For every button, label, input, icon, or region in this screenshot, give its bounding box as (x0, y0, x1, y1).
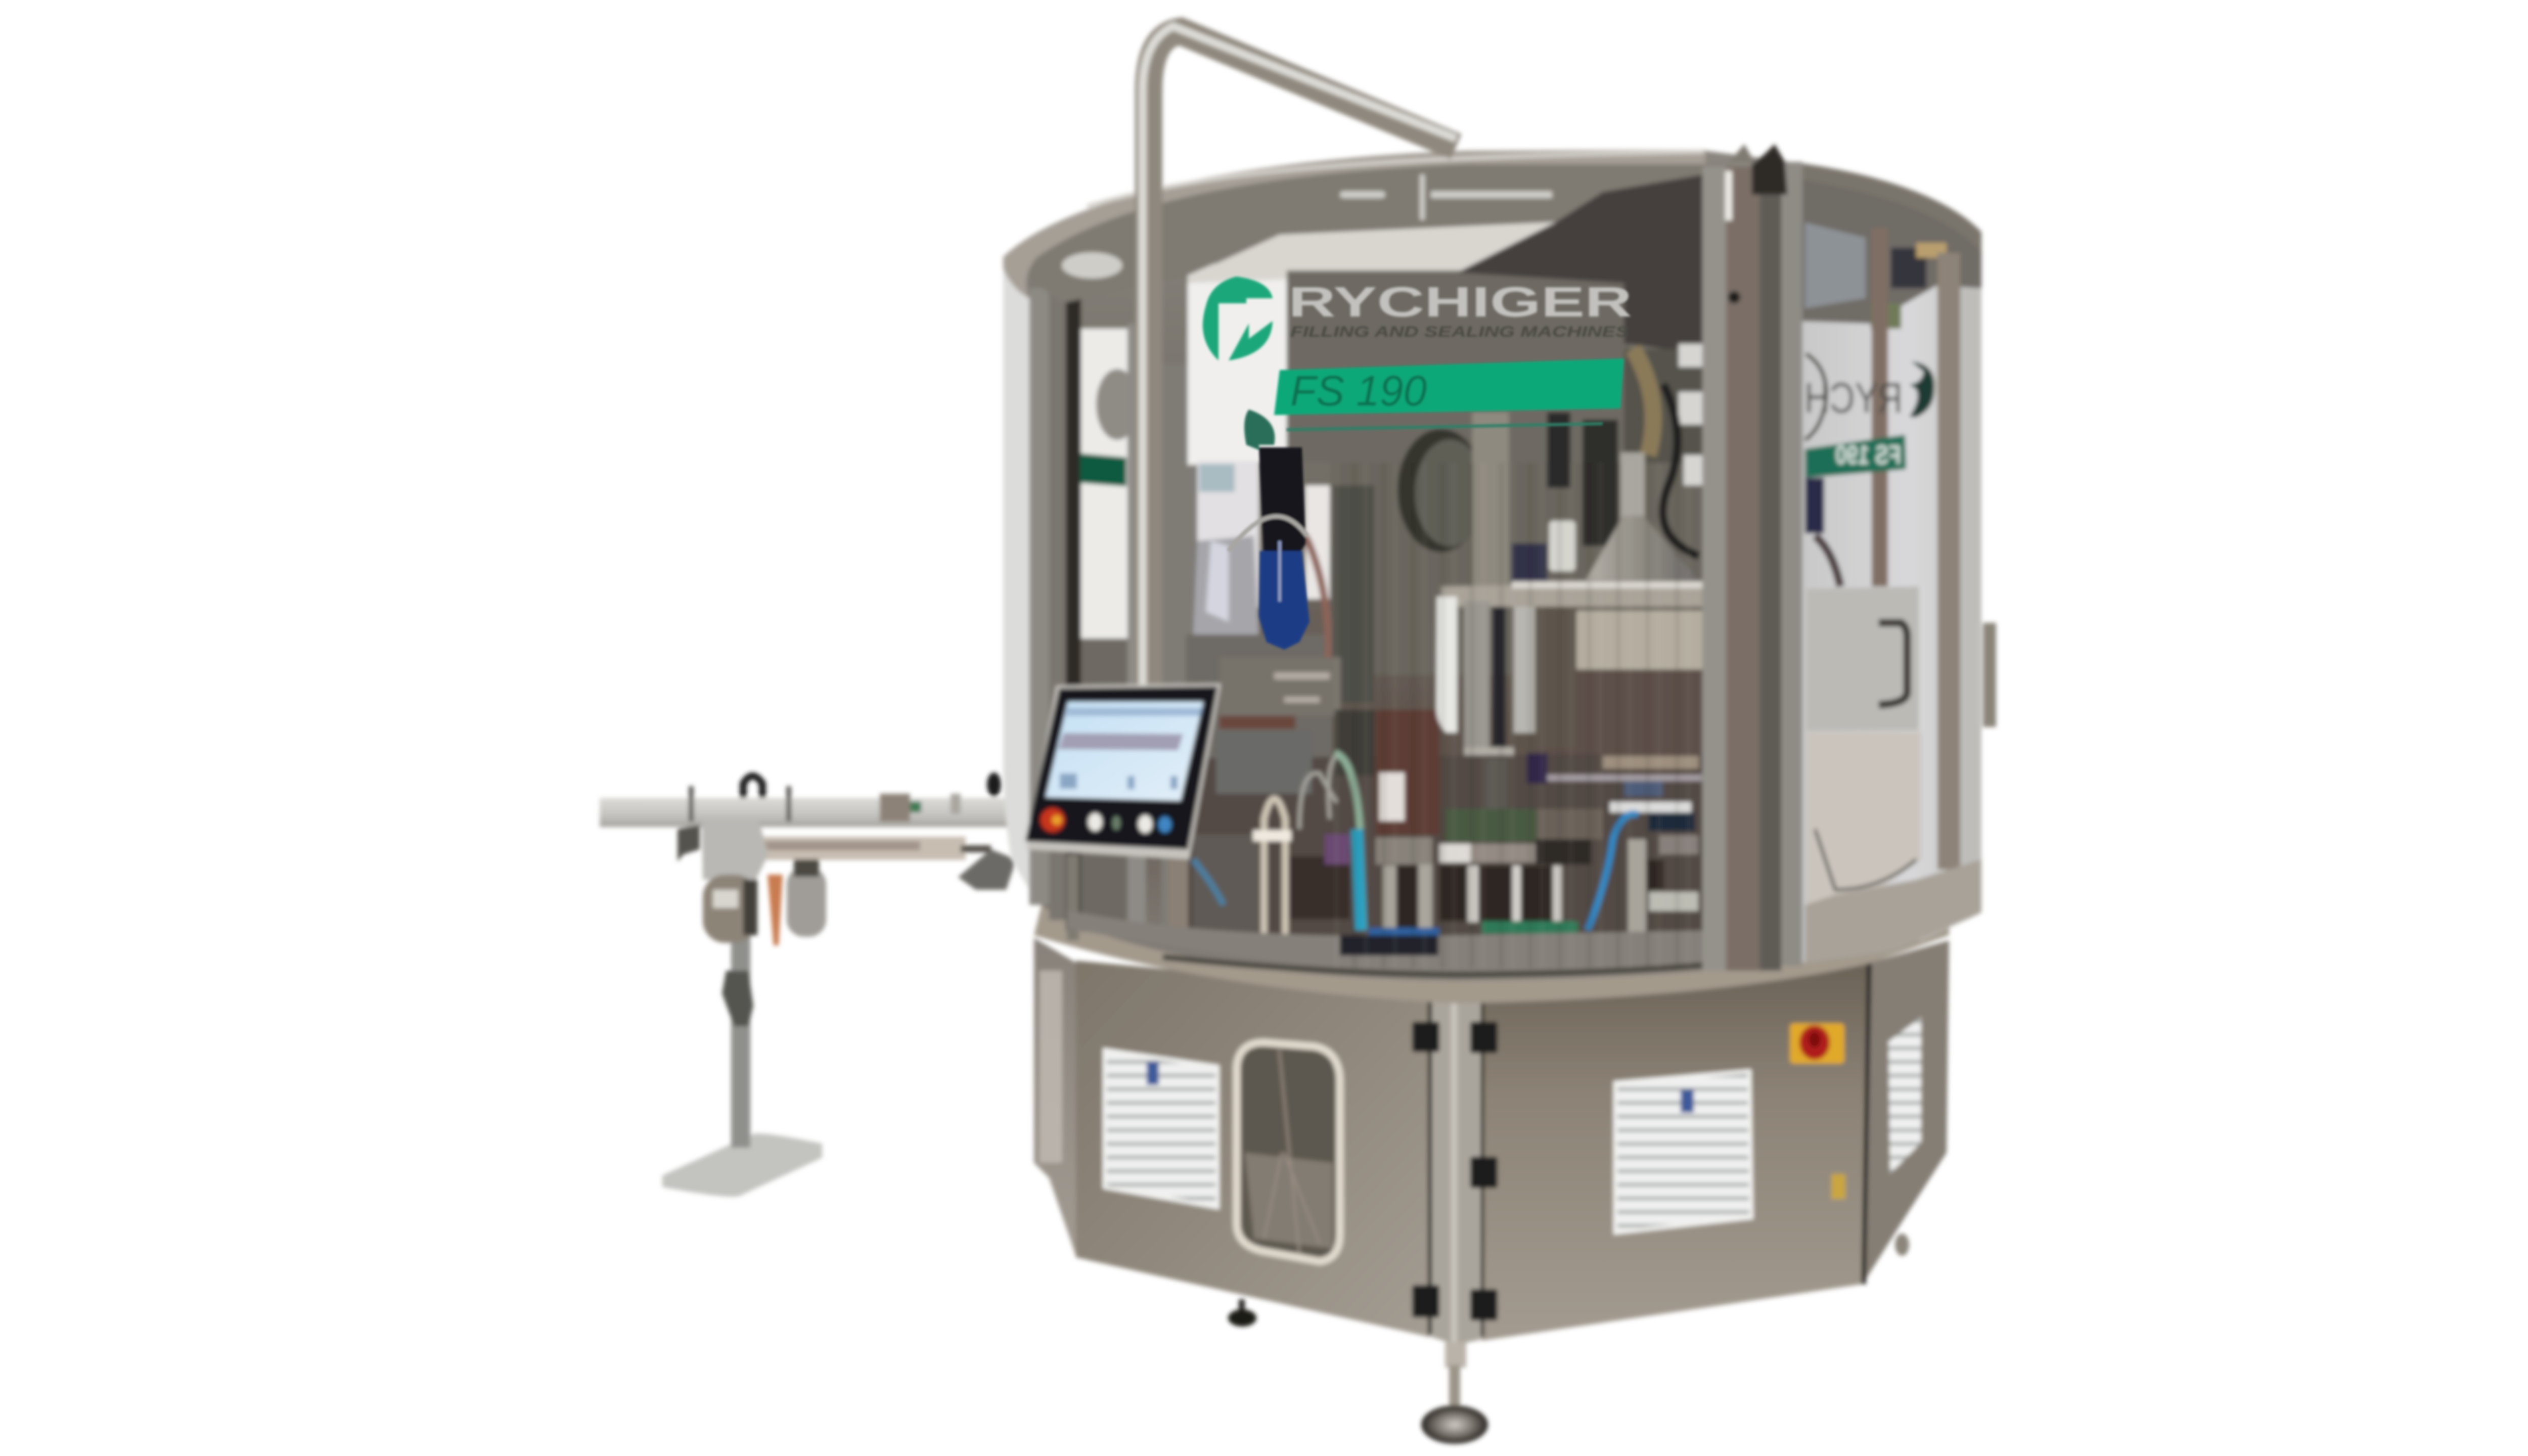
white sensor (1549, 521, 1575, 571)
mirrored logo through glass (1804, 354, 1934, 440)
white block lower right (1649, 892, 1698, 911)
funnel (1586, 452, 1698, 580)
base: left door (1076, 961, 1431, 1337)
blue tubes (1193, 814, 1638, 930)
wordmark backing (1287, 270, 1631, 463)
post right of pipe (1161, 364, 1197, 935)
black motor housing (1259, 447, 1305, 561)
door seam shadows (1864, 963, 1869, 1284)
bracket (702, 819, 769, 880)
blue-grey reflection (1805, 222, 1866, 308)
green wires (1335, 753, 1360, 829)
pipe (1143, 26, 1456, 698)
stand pole (731, 875, 750, 1148)
right door hinges (1470, 1022, 1498, 1321)
red brown cluster (1376, 710, 1439, 835)
front foot (1421, 1342, 1488, 1444)
window lower reflection (1245, 1153, 1333, 1249)
logo wordmark: RYCHIGER (1288, 278, 1632, 326)
handle (743, 776, 762, 798)
connector block (1340, 928, 1439, 956)
pale rear area (1197, 461, 1259, 608)
upper rail (600, 798, 1012, 827)
small indicator (1112, 816, 1120, 830)
stand clamp (722, 971, 753, 1026)
shelf clutter right (1446, 753, 1702, 842)
pale rails near panel (1274, 672, 1330, 703)
top highlights (1062, 174, 1552, 279)
emergency stop (1790, 1023, 1844, 1064)
interior back section (1331, 463, 1705, 675)
right top rim (1781, 161, 1981, 253)
top inner shade (1011, 163, 1709, 303)
knob (987, 772, 1001, 797)
table legs (1383, 839, 1646, 935)
rail fittings (689, 786, 961, 822)
right vent (1615, 1071, 1751, 1233)
purple wires (1325, 834, 1350, 864)
grey lower band under frame (1624, 349, 1704, 465)
motor right (787, 867, 826, 937)
rear roundel (1096, 369, 1139, 440)
base: far left facet (1034, 938, 1077, 1259)
reflected logo piece (1244, 410, 1275, 450)
white buttons (1088, 813, 1102, 831)
top rim left (1003, 150, 1705, 298)
loop handle (1264, 799, 1285, 935)
red strip (1220, 716, 1295, 729)
latch handle (1879, 623, 1907, 705)
conveyor with stand (600, 772, 1016, 1197)
machine (1003, 26, 1996, 1444)
side clip (678, 825, 700, 861)
grey column (1472, 412, 1509, 586)
far left facet reflection (1040, 971, 1062, 1163)
small rear foot (1228, 1299, 1256, 1327)
warning label (1831, 1174, 1845, 1199)
post highlight (1451, 991, 1457, 1342)
orange tube (768, 875, 783, 945)
cables by panel (1815, 536, 1840, 586)
blue button (1158, 816, 1171, 833)
table edge dark (1163, 957, 1709, 975)
white vial (1379, 772, 1405, 821)
motor tube loop (1229, 516, 1307, 551)
grey wire loops (1299, 753, 1340, 829)
cyan tube (1357, 829, 1361, 930)
lower right panel (1807, 732, 1921, 935)
screen lower icons (1060, 774, 1178, 789)
right side tab (1983, 623, 1996, 727)
left vent (1105, 1050, 1217, 1207)
model band (1274, 358, 1624, 415)
lower right tubing (1815, 829, 1916, 890)
table surface (1067, 910, 1709, 973)
screen (1046, 702, 1203, 801)
white gaps behind cables (1679, 344, 1704, 485)
lower mechanism area (1186, 753, 1704, 940)
center post (1432, 988, 1480, 1345)
sloped translucent panel (1188, 222, 1556, 283)
second grey post (1049, 273, 1066, 920)
side vent (1888, 1017, 1921, 1174)
table rim (1034, 905, 1949, 1004)
drum glass body (1003, 151, 1981, 981)
logo mark (1203, 277, 1273, 360)
right vent badge (1681, 1089, 1694, 1113)
motor left (703, 875, 757, 943)
right inner clutter (1871, 243, 1947, 329)
left lower rear stripes (1081, 639, 1129, 932)
left door hinges (1412, 1022, 1439, 1317)
model band: FS 190 (1290, 367, 1427, 415)
left vent badge (1147, 1062, 1159, 1085)
lower right cast edge (1805, 859, 1981, 963)
white bracket (1436, 597, 1457, 733)
screen header icons (1066, 708, 1202, 716)
green board (1482, 921, 1578, 934)
shelf (1441, 581, 1703, 607)
table work plate (1376, 835, 1698, 864)
dark area under cluster (1335, 710, 1375, 776)
motor highlight (1278, 541, 1281, 602)
dark column (1333, 485, 1374, 703)
gearbox cluster (1193, 536, 1259, 637)
rear logo band (1080, 453, 1126, 486)
motor circular cover (1397, 429, 1484, 552)
white gap by logo (1188, 253, 1287, 465)
left lower posts (1067, 834, 1259, 940)
stand base plate (662, 1133, 822, 1197)
mirrored model label (1805, 435, 1906, 478)
base: right door (1481, 963, 1869, 1341)
top rim highlight (1087, 152, 1704, 206)
right top mechanism (1800, 169, 1981, 324)
drum left bright edge (1003, 268, 1029, 890)
right glass section (1800, 163, 1981, 963)
right latch panel (1807, 586, 1919, 731)
window wires (1264, 1049, 1320, 1254)
front door column (1702, 144, 1802, 971)
dark vertical strip (1066, 243, 1081, 930)
screen status row (1059, 733, 1183, 750)
lower rear grey (1186, 634, 1332, 761)
glass vertical streaks (1335, 463, 1704, 968)
mirrored model label: FS 190 (1835, 440, 1901, 470)
white gap center (1305, 485, 1330, 599)
dark cables (1663, 384, 1699, 556)
reflected green line (1287, 424, 1603, 430)
dark lower cavities (1287, 856, 1663, 929)
touch panel (1025, 684, 1221, 859)
dark brown wall (1536, 670, 1703, 756)
mirrored logo through glass: RYCH (1804, 374, 1903, 422)
emergency button (1041, 808, 1065, 832)
rods next to pipe (1127, 324, 1146, 930)
dark blocks (1512, 412, 1618, 586)
conveyor coupling (958, 849, 1016, 890)
blue motor (1259, 551, 1310, 650)
rear tube (1305, 536, 1329, 677)
inspection window (1237, 1042, 1340, 1261)
handle clamp (1253, 830, 1291, 841)
left grey post (1029, 288, 1049, 905)
beige plate (1576, 611, 1703, 669)
front branding and blue motor (1203, 277, 1632, 650)
dark frame right of panel (1457, 174, 1704, 354)
navy block (1805, 478, 1824, 533)
upper left mix (1220, 657, 1341, 716)
lower rail (753, 837, 966, 860)
see-through gap left (1081, 329, 1127, 639)
right vertical rods (1872, 228, 1981, 885)
base: far right facet (1863, 940, 1949, 1284)
flat grey plate behind panel (1216, 731, 1312, 794)
logo tagline: FILLING AND SEALING MACHINES (1290, 324, 1629, 340)
linear guide (1464, 602, 1535, 809)
right foot (1895, 1234, 1909, 1256)
rear valve block (1199, 464, 1235, 492)
connector overlap (1340, 935, 1438, 956)
colored wire bundle (1633, 349, 1653, 455)
